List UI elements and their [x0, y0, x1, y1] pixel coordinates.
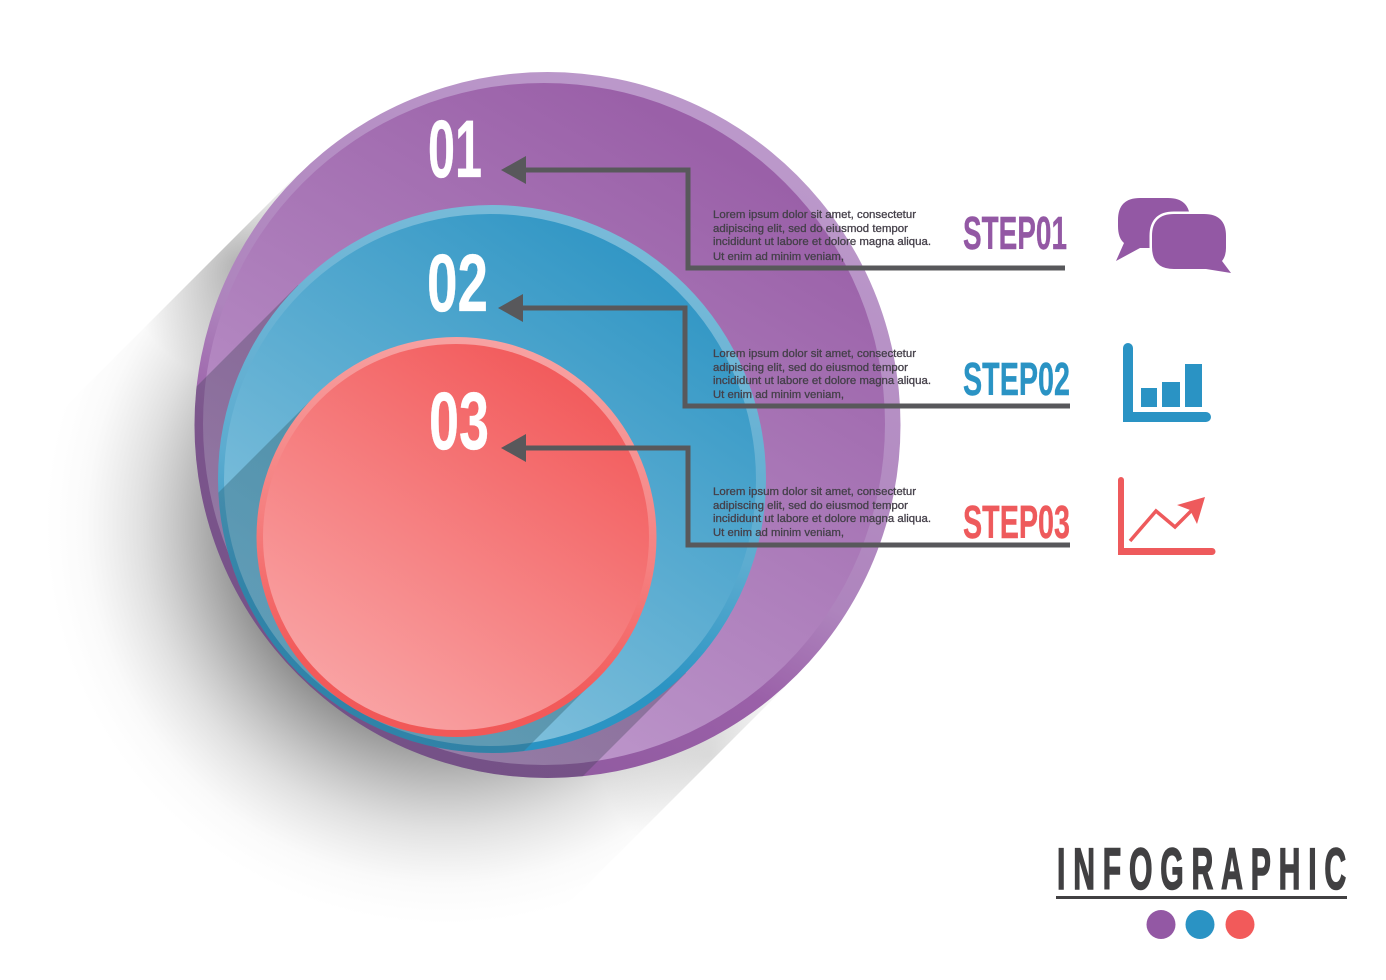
text block: step 1: Lorem ipsum dolor sit amet, consectetur — [713, 209, 916, 221]
arrow: step 3 leader — [501, 434, 1070, 545]
panel: nested circles — [150, 72, 900, 800]
arrow: step 1 leader — [501, 156, 1065, 268]
legend dots — [1146, 910, 1254, 939]
text block: step 2: Ut enim ad minim veniam, — [713, 389, 844, 401]
shadow cast by red circle — [218, 400, 584, 753]
long shadow of the circle stack — [0, 175, 797, 980]
text block: step 1: adipiscing elit, sed do eiusmod tempor — [713, 223, 908, 235]
text block: step 3 — [713, 486, 931, 539]
text block: step 3: Ut enim ad minim veniam, — [713, 527, 844, 539]
icon: line chart with arrow — [1118, 477, 1216, 555]
number 01: 01 — [428, 104, 482, 195]
icon: bar chart — [1123, 343, 1211, 422]
number 03: 03 — [429, 376, 489, 467]
heading: STEP01: STEP01 — [963, 207, 1067, 259]
text block: step 3: adipiscing elit, sed do eiusmod tempor — [713, 500, 908, 512]
shadow cast by blue circle — [194, 285, 686, 778]
text block: step 2: adipiscing elit, sed do eiusmod tempor — [713, 362, 908, 374]
blue circle: step 2 — [218, 205, 766, 753]
purple circle: step 1 — [194, 72, 900, 778]
text block: step 3: Lorem ipsum dolor sit amet, consectetur — [713, 486, 916, 498]
icon: speech bubbles — [1116, 198, 1231, 273]
text block: step 3: incididunt ut labore et dolore magna aliqua. — [713, 513, 931, 525]
title underline — [1056, 896, 1347, 899]
text block: step 1: incididunt ut labore et dolore magna aliqua. — [713, 236, 931, 248]
arrow: step 2 leader — [498, 294, 1070, 406]
heading: STEP02: STEP02 — [963, 353, 1070, 405]
text block: step 2 — [713, 348, 931, 401]
text block: step 1: Ut enim ad minim veniam, — [713, 251, 844, 263]
title: INFOGRAPHIC: INFOGRAPHIC — [1057, 836, 1346, 902]
number 02: 02 — [427, 238, 488, 329]
heading: STEP03: STEP03 — [963, 496, 1070, 548]
text block: step 2: incididunt ut labore et dolore magna aliqua. — [713, 375, 931, 387]
red circle: step 3 — [256, 337, 656, 737]
text block: step 1 — [713, 209, 931, 263]
text block: step 2: Lorem ipsum dolor sit amet, consectetur — [713, 348, 916, 360]
